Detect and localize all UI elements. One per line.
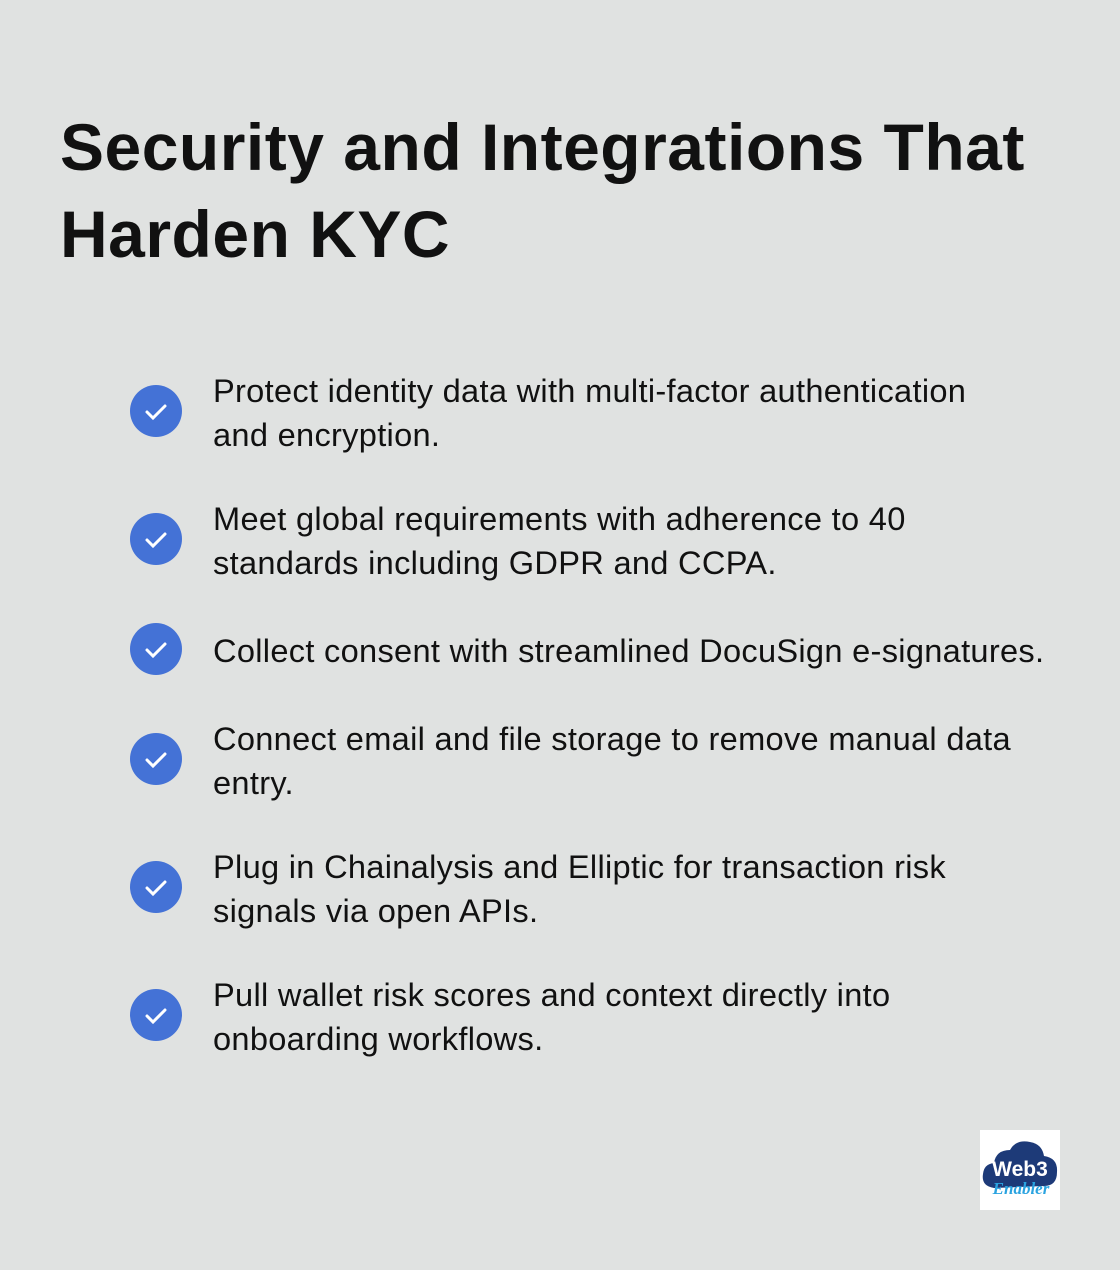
text — [213, 976, 890, 1057]
text: Plug in Chainalysis and Elliptic for transaction risk — [213, 848, 946, 885]
item 6 — [130, 976, 890, 1057]
item 2 — [130, 500, 906, 581]
text: onboarding workflows. — [213, 1020, 543, 1057]
logo — [980, 1130, 1060, 1210]
text: entry. — [213, 764, 294, 801]
text — [213, 848, 946, 929]
text: Pull wallet risk scores and context directly into — [213, 976, 890, 1013]
item 3 — [130, 623, 1044, 675]
logo: Enabler — [992, 1179, 1050, 1198]
icon: check — [130, 733, 182, 785]
text: and encryption. — [213, 416, 440, 453]
title — [60, 110, 1025, 271]
icon: check — [130, 623, 182, 675]
text: Collect consent with streamlined DocuSign e-signatures. — [213, 632, 1044, 669]
text — [213, 720, 1011, 801]
text — [213, 500, 906, 581]
item 5 — [130, 848, 946, 929]
text: signals via open APIs. — [213, 892, 538, 929]
item 1 — [130, 372, 966, 453]
text: Connect email and file storage to remove manual data — [213, 720, 1011, 757]
icon: check — [130, 385, 182, 437]
icon: check — [130, 513, 182, 565]
title: Harden KYC — [60, 197, 450, 271]
text: Meet global requirements with adherence to 40 — [213, 500, 906, 537]
text: standards including GDPR and CCPA. — [213, 544, 777, 581]
logo: Web3 — [992, 1158, 1048, 1181]
title: Security and Integrations That — [60, 110, 1025, 184]
icon: check — [130, 861, 182, 913]
item 4 — [130, 720, 1011, 801]
text — [213, 372, 966, 453]
text: Protect identity data with multi-factor authentication — [213, 372, 966, 409]
icon: check — [130, 989, 182, 1041]
